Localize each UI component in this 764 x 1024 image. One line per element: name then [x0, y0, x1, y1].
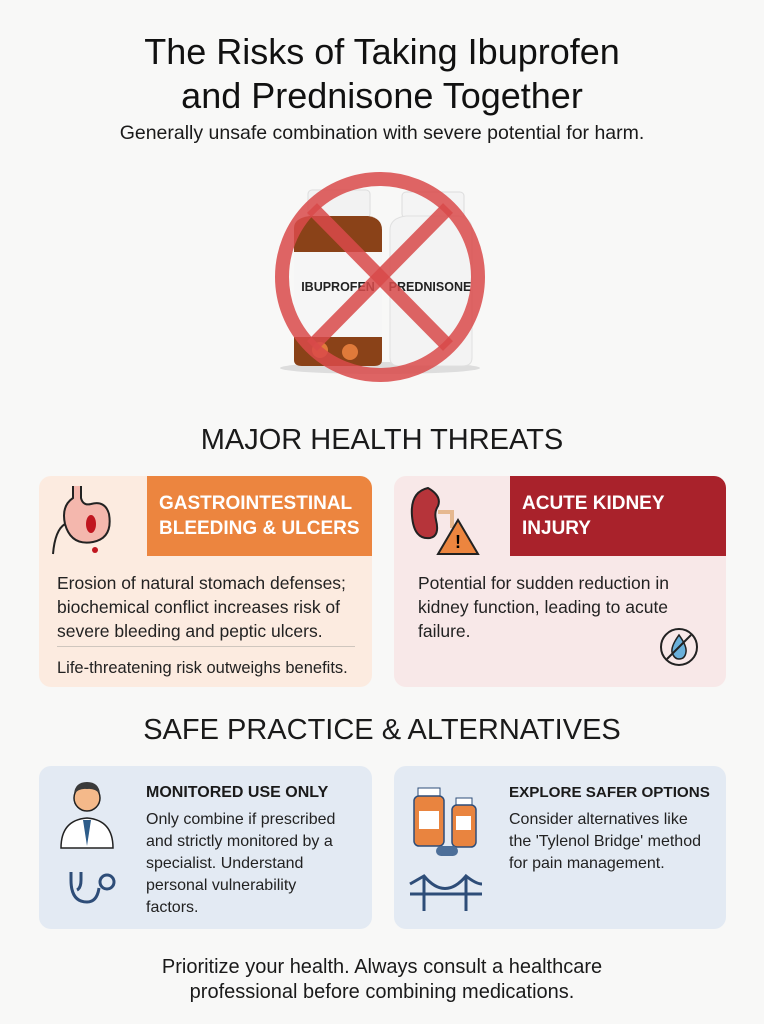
- panel: GI bleeding: [39, 476, 372, 687]
- heading: MONITORED USE ONLY: [146, 784, 328, 801]
- subtitle: Generally unsafe combination with severe potential for harm.: [120, 122, 644, 144]
- footer message: [162, 956, 602, 1003]
- illustration: prohibited pill bottles: [275, 172, 485, 382]
- body text: biochemical conflict increases risk of: [57, 597, 340, 617]
- body text: the 'Tylenol Bridge' method: [509, 833, 701, 850]
- body text: and strictly monitored by a: [146, 833, 333, 850]
- header: [147, 476, 372, 556]
- footer message: Prioritize your health. Always consult a healthcare: [162, 956, 602, 978]
- footer message: professional before combining medications.: [190, 981, 574, 1003]
- illustration: prohibited pill bottles: PREDNISONE: [389, 280, 471, 294]
- body text: specialist. Understand: [146, 855, 303, 872]
- heading: safe practice: SAFE PRACTICE & ALTERNATIVES: [143, 714, 621, 746]
- heading: EXPLORE SAFER OPTIONS: [509, 784, 710, 801]
- body text: personal vulnerability: [146, 877, 296, 894]
- header: INJURY: [522, 518, 591, 539]
- body text: Only combine if prescribed: [146, 811, 335, 828]
- header: [510, 476, 726, 556]
- body text: kidney function, leading to acute: [418, 597, 668, 617]
- body text: severe bleeding and peptic ulcers.: [57, 621, 323, 641]
- title: and Prednisone Together: [181, 75, 583, 116]
- body text: Potential for sudden reduction in: [418, 573, 669, 593]
- icon: kidney with warning: !: [455, 532, 461, 552]
- body text: failure.: [418, 621, 471, 641]
- panel: safer options: [394, 766, 726, 929]
- header: ACUTE KIDNEY: [522, 493, 665, 514]
- icon: no water: [660, 628, 698, 666]
- icon: stomach: [52, 486, 111, 554]
- header: GASTROINTESTINAL: [159, 493, 352, 514]
- body text: for pain management.: [509, 855, 665, 872]
- body text: [509, 811, 701, 872]
- body text: factors.: [146, 899, 198, 916]
- icon: bottles and bridge: [409, 788, 482, 911]
- body text: [57, 573, 346, 641]
- note: Life-threatening risk outweighs benefits.: [57, 659, 348, 677]
- icon: doctor and stethoscope: [60, 782, 116, 904]
- body text: Consider alternatives like: [509, 811, 688, 828]
- title: The Risks of Taking Ibuprofen: [144, 31, 620, 72]
- body text: [418, 573, 669, 641]
- title: [144, 31, 620, 116]
- body text: Erosion of natural stomach defenses;: [57, 573, 346, 593]
- heading: major health threats: MAJOR HEALTH THREATS: [201, 424, 563, 456]
- panel: kidney injury: [394, 476, 726, 687]
- header: BLEEDING & ULCERS: [159, 518, 360, 539]
- panel: monitored use: [39, 766, 372, 929]
- body text: [146, 811, 335, 916]
- illustration: prohibited pill bottles: IBUPROFEN: [301, 280, 375, 294]
- icon: kidney with warning: [410, 487, 480, 555]
